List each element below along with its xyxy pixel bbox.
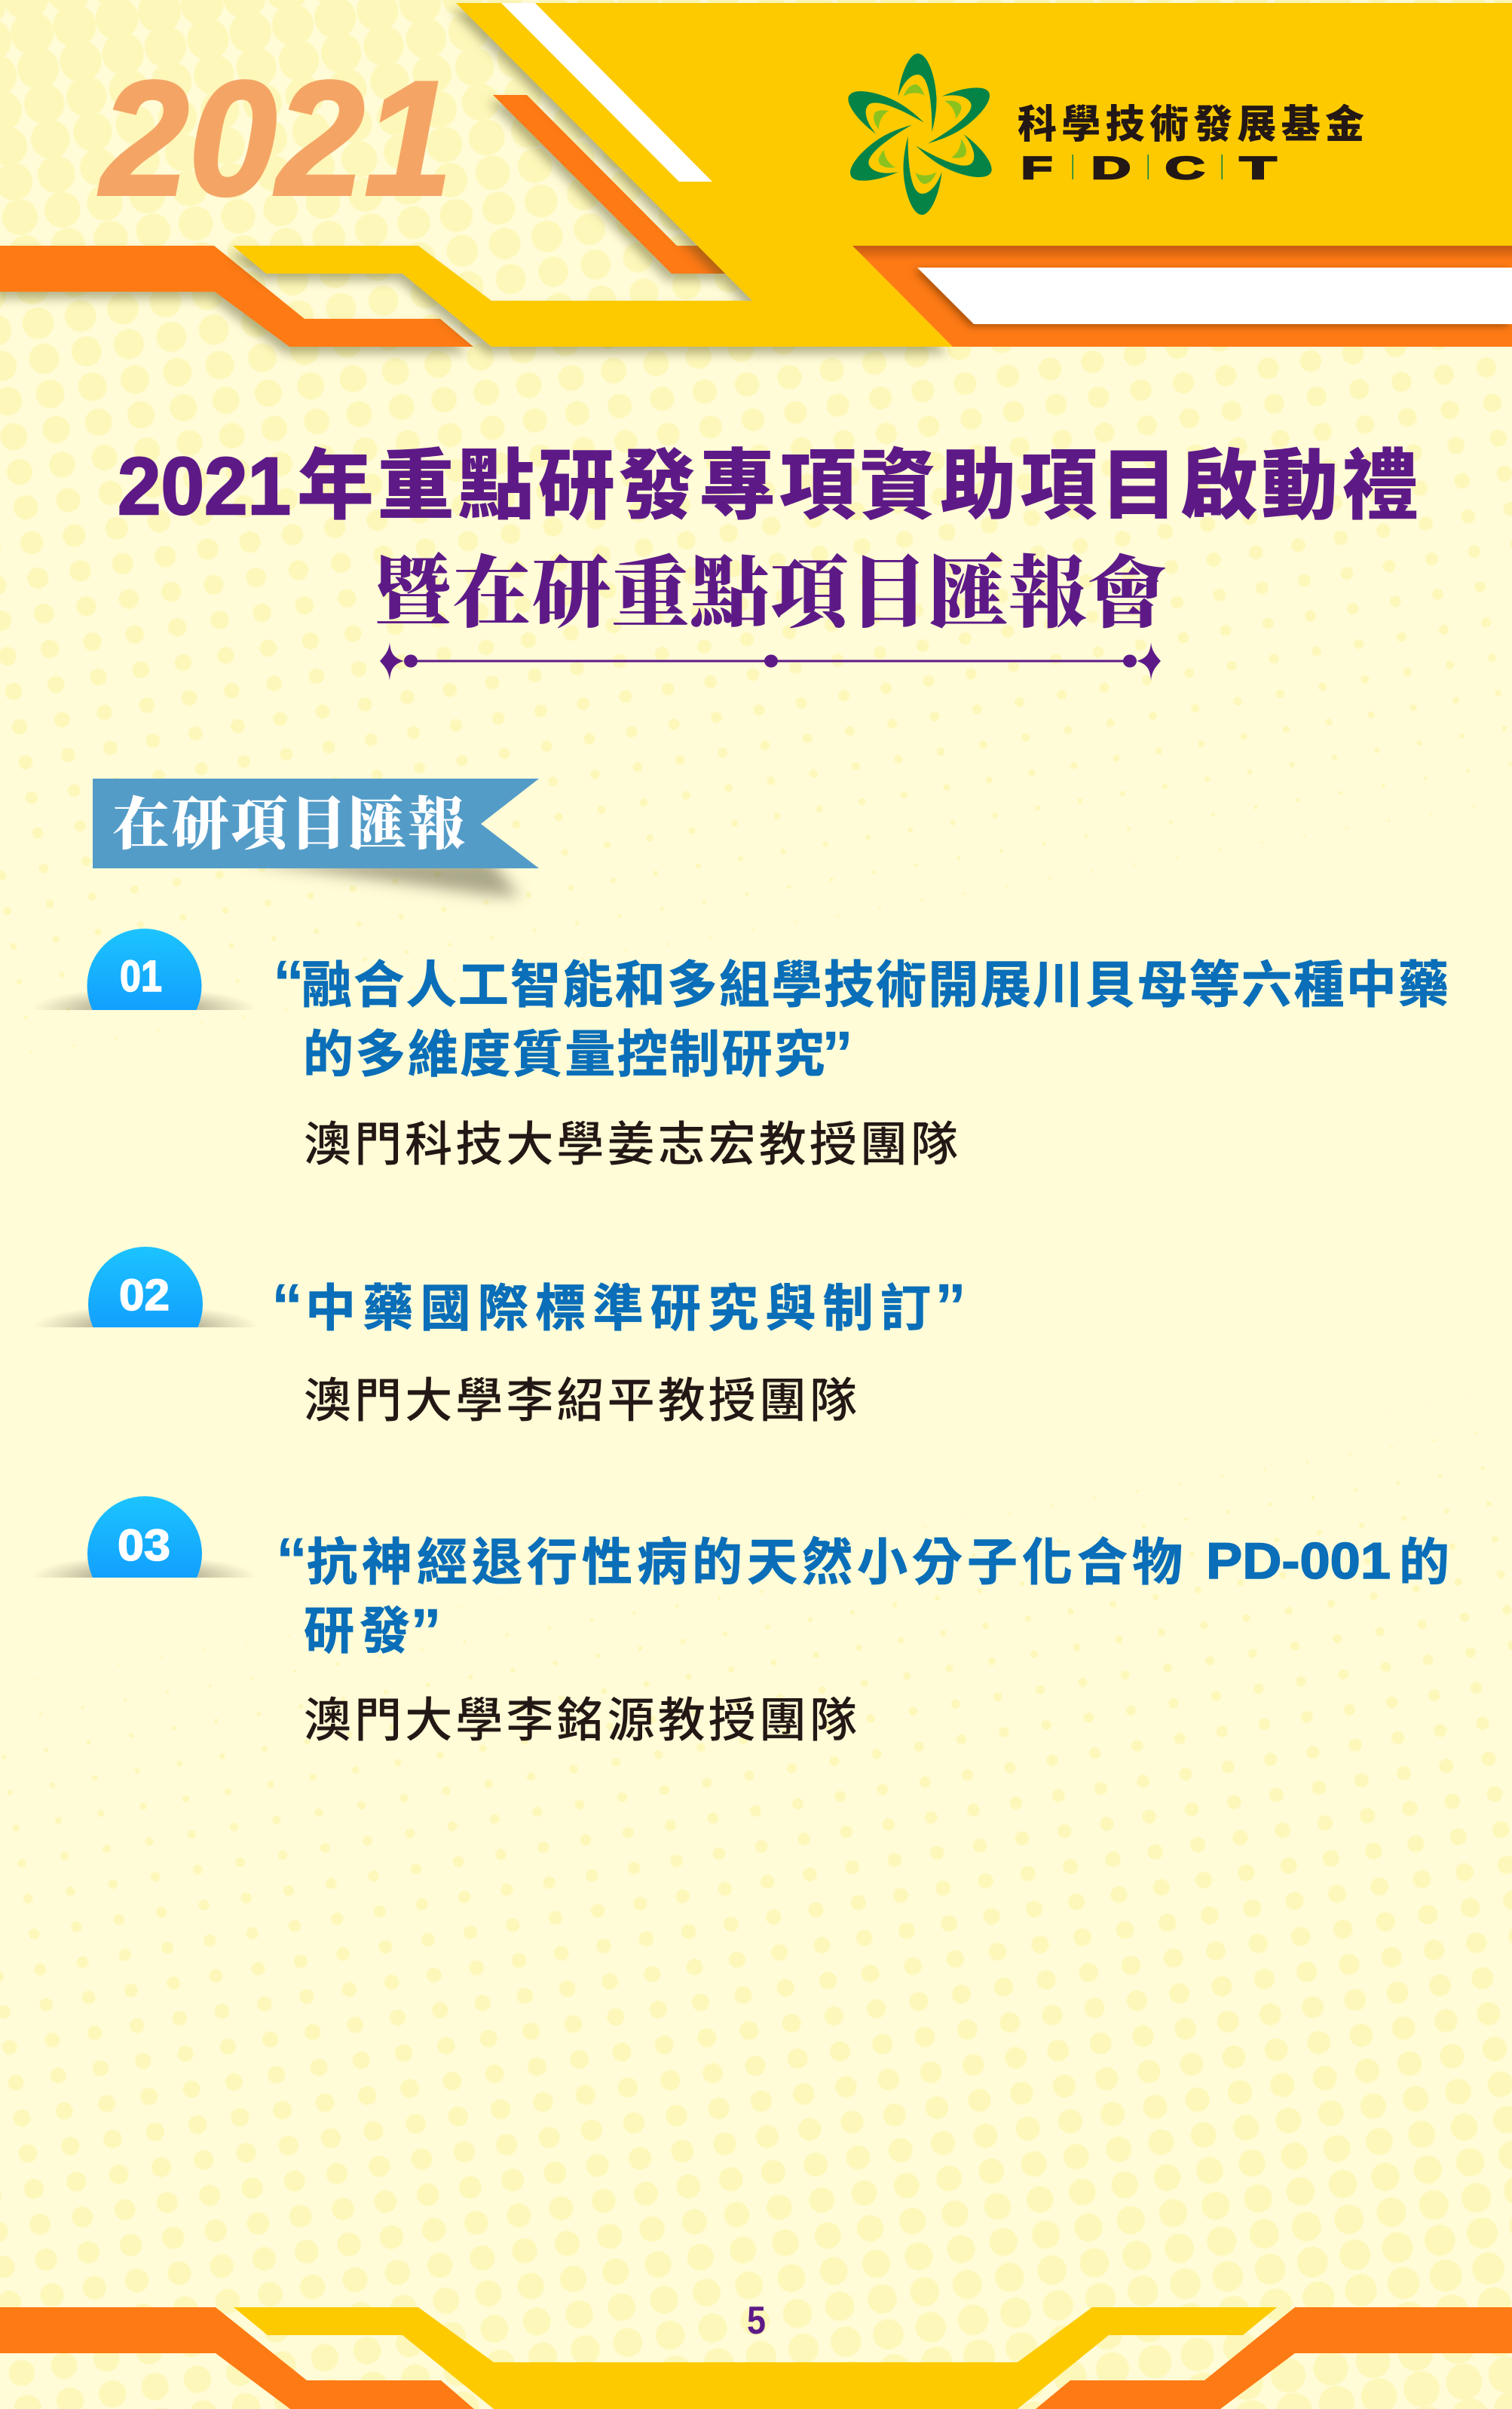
item 01 project title <box>273 947 1449 1089</box>
item 01 team: 澳門科技大學姜志宏教授團隊 <box>304 1119 958 1171</box>
item 01 project title: ” <box>822 1018 853 1089</box>
logo name FDCT: T <box>1240 150 1277 185</box>
logo name FDCT: F <box>1021 150 1052 185</box>
title divider ornament <box>380 642 1161 681</box>
item 03 badge <box>39 1496 249 1578</box>
year 2021: 2021 <box>98 47 452 229</box>
header banner <box>0 3 1512 347</box>
item 01 badge <box>40 929 249 1010</box>
item 03 project title: “ <box>276 1525 308 1596</box>
item 02 project title: 中藥國際標準研究與制訂 <box>305 1281 931 1337</box>
item 03 project title: PD-001 <box>1206 1532 1391 1590</box>
footer banner <box>0 2307 1512 2409</box>
item 01 project title: 的多維度質量控制研究 <box>303 1027 825 1083</box>
item 02 project title: ” <box>935 1271 966 1342</box>
page number: 5 <box>747 2299 766 2343</box>
section ribbon: 在研項目匯報: 在研項目匯報 <box>112 794 465 857</box>
title: 暨在研重點項目匯報會 <box>373 551 1166 638</box>
item 02 badge <box>41 1247 250 1327</box>
item 03 project title <box>276 1525 1449 1667</box>
logo name FDCT: D <box>1091 150 1131 185</box>
title <box>118 440 1419 638</box>
item 01 project title: 融合人工智能和多組學技術開展川貝母等六種中藥 <box>301 957 1449 1014</box>
icon: FDCT logo flower <box>839 54 1001 215</box>
logo name FDCT <box>1021 150 1277 185</box>
item 02 project title: “ <box>271 1271 303 1342</box>
item 03 project title: ” <box>410 1596 442 1667</box>
item 01 project title: “ <box>273 947 305 1018</box>
title: 年重點研發專項資助項目啟動禮 <box>297 443 1419 529</box>
item 03 project title: 研發 <box>304 1603 410 1660</box>
item 03 badge: 03 <box>118 1521 170 1570</box>
item 03 project title: 的 <box>1399 1535 1449 1591</box>
item 01 badge: 01 <box>120 952 162 1001</box>
logo name chinese: 科學技術發展基金 <box>1018 103 1364 147</box>
logo name FDCT: C <box>1165 150 1204 185</box>
item 02 team: 澳門大學李紹平教授團隊 <box>304 1375 857 1428</box>
item 03 team: 澳門大學李銘源教授團隊 <box>304 1694 857 1747</box>
item 02 badge: 02 <box>119 1271 170 1320</box>
title: 2021 <box>118 440 291 531</box>
item 03 project title: 抗神經退行性病的天然小分子化合物 <box>307 1535 1183 1591</box>
section ribbon: 在研項目匯報 <box>93 779 539 897</box>
